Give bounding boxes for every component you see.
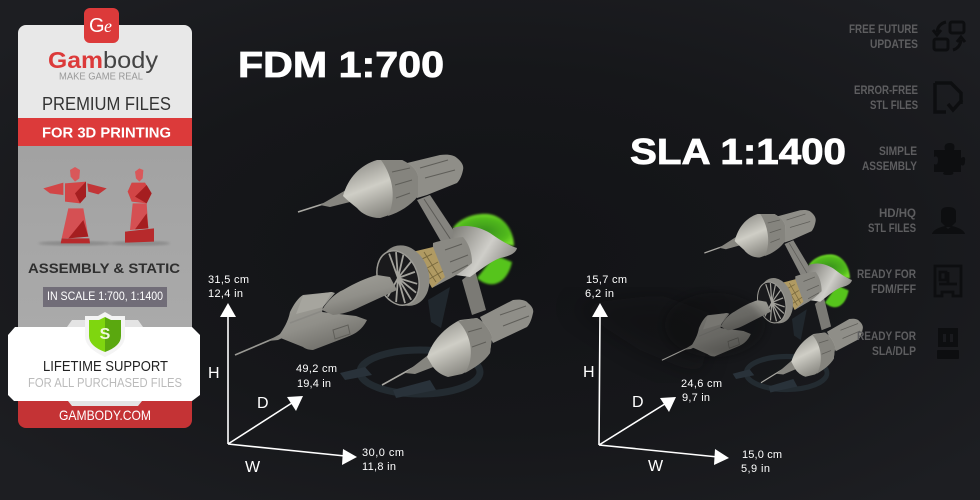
wordmark: Gam: [48, 47, 103, 73]
axis letters: [208, 365, 269, 476]
panel: features list: [849, 22, 965, 359]
feature labels: HD/HQ: [879, 208, 916, 220]
ribbon tabs: [67, 320, 143, 406]
axis letters: H: [583, 364, 595, 381]
dimension values: 6,2 in: [585, 288, 614, 300]
feature labels: FDM/FFF: [871, 284, 916, 296]
axis letters: H: [208, 365, 220, 382]
dimension values: [585, 274, 782, 475]
dimension values: 9,7 in: [682, 392, 710, 404]
axis letters: W: [245, 459, 261, 476]
feature labels: READY FOR: [857, 269, 917, 281]
axis letters: W: [648, 458, 664, 475]
ship shadow: [570, 295, 715, 375]
feature labels: ASSEMBLY: [862, 161, 917, 173]
icon: shield: [85, 312, 125, 357]
title: SLA: SLA 1:1400: [630, 131, 846, 172]
dimension values: 15,0 cm: [742, 449, 782, 461]
icon: checked document: [935, 83, 962, 112]
model: SLA spaceship: [662, 210, 863, 392]
red band: [18, 118, 192, 146]
small ship shade: [665, 293, 765, 357]
footer bar: [18, 400, 192, 428]
icon: puzzle piece: [934, 143, 965, 175]
support ribbon: [8, 327, 200, 401]
support text: LIFETIME SUPPORT: [43, 358, 168, 375]
wordmark: [48, 47, 159, 82]
feature labels: READY FOR: [857, 331, 917, 343]
icon: SLA printer: [937, 328, 959, 359]
dimension values: 11,8 in: [362, 461, 396, 473]
card top section: [18, 25, 192, 118]
FDM dimension axes: [208, 274, 404, 476]
logo badge: e: [104, 16, 112, 36]
statues: [38, 167, 170, 246]
feature labels: STL FILES: [870, 100, 918, 112]
icon: FDM printer: [935, 266, 961, 296]
axis letters: [583, 364, 664, 475]
dimension values: 15,7 cm: [586, 274, 627, 286]
logo badge: G: [89, 15, 105, 37]
grey section: [18, 146, 192, 402]
feature labels: [849, 24, 918, 358]
wordmark: body: [103, 47, 159, 73]
axis letters: D: [632, 394, 644, 411]
dimension values: 31,5 cm: [208, 274, 249, 286]
icon: updates: [933, 22, 965, 50]
SLA dimension axes: [583, 274, 782, 475]
feature labels: FREE FUTURE: [849, 24, 918, 36]
heading: PREMIUM FILES: [42, 94, 171, 114]
band text: FOR 3D PRINTING: [42, 126, 171, 142]
dimension values: 19,4 in: [297, 378, 331, 390]
dimension values: [208, 274, 404, 473]
dimension values: 5,9 in: [741, 463, 770, 475]
icon: bust: [932, 207, 965, 234]
title: FDM: FDM 1:700: [238, 44, 444, 85]
subheading: ASSEMBLY & STATIC: [28, 260, 180, 276]
scale tag: IN SCALE 1:700, 1:1400: [47, 289, 163, 303]
feature labels: SIMPLE: [879, 146, 917, 158]
footer link: GAMBODY.COM: [59, 407, 151, 423]
feature labels: STL FILES: [868, 223, 916, 235]
panel: Gambody brand card: [8, 8, 200, 428]
wordmark: MAKE GAME REAL: [59, 70, 143, 82]
dimension values: 12,4 in: [208, 288, 243, 300]
feature labels: ERROR-FREE: [854, 85, 918, 97]
scale tag: [43, 287, 167, 307]
feature labels: UPDATES: [870, 39, 918, 51]
dimension values: 49,2 cm: [296, 363, 337, 375]
dimension values: 24,6 cm: [681, 378, 722, 390]
model: FDM spaceship: [235, 155, 533, 398]
axis letters: D: [257, 395, 269, 412]
support subtext: FOR ALL PURCHASED FILES: [28, 375, 182, 390]
logo badge: [84, 8, 119, 43]
icon: shield: S: [100, 326, 111, 343]
feature labels: SLA/DLP: [872, 346, 916, 358]
dimension values: 30,0 cm: [362, 447, 404, 459]
